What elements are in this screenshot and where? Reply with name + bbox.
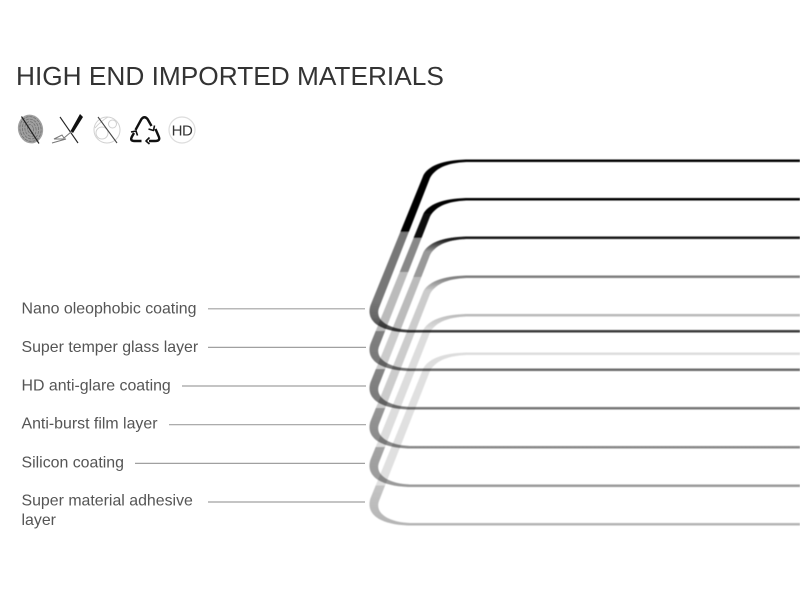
icon: fingerprint crossed out (15, 112, 46, 146)
title: HIGH END IMPORTED MATERIALS (16, 61, 444, 91)
label: Super material adhesive layer (22, 493, 365, 529)
icon: HD: HD (172, 122, 193, 139)
label: Nano oleophobic coating: Nano oleophobic coating (22, 300, 196, 317)
layer 3 outline (369, 236, 800, 410)
icon row (15, 112, 195, 146)
icon: antibacterial crossed out (94, 117, 120, 143)
layer 6 outline (369, 352, 800, 526)
layer 2 outline (369, 198, 800, 371)
label: Silicon coating: Silicon coating (22, 454, 124, 471)
label: Anti-burst film layer: Anti-burst film layer (22, 416, 158, 433)
label: Super material adhesive layer: layer (22, 512, 57, 529)
label: Super material adhesive layer: Super material adhesive (22, 493, 193, 510)
layer 4 outline (369, 276, 800, 448)
layer 1 outline (369, 160, 800, 332)
icon: HD (169, 117, 195, 143)
icon: scratch resistant (52, 114, 83, 143)
layer 5 outline (369, 314, 800, 487)
icon: recycle (131, 117, 159, 144)
label: Super temper glass layer: Super temper glass layer (22, 339, 199, 356)
label: HD anti-glare coating: HD anti-glare coating (22, 378, 171, 395)
layer diagram (369, 160, 800, 526)
